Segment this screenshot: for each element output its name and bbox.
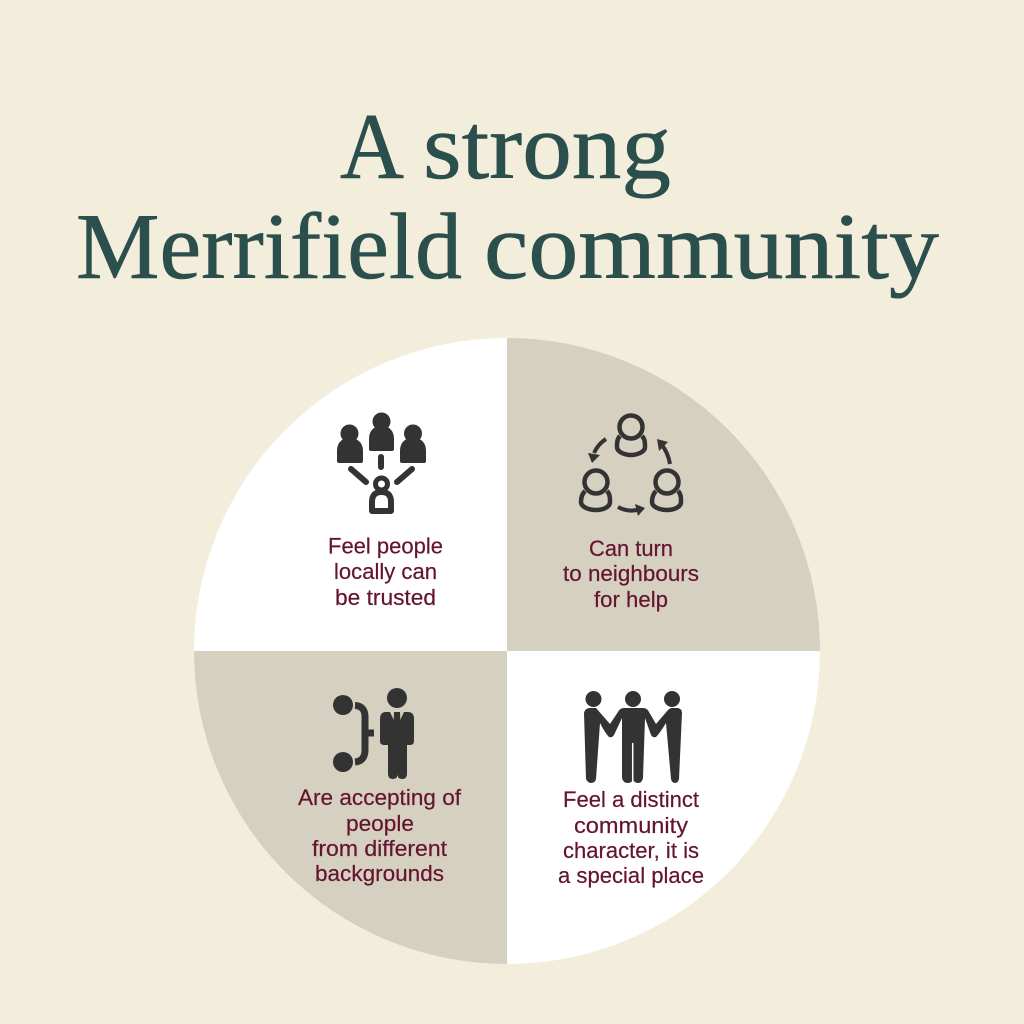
panel: accepting [194,651,507,964]
label: feel a distinct community character, it is a special place: character, it is [563,838,699,863]
icon: three people with cycle arrows [581,416,681,516]
label: feel people locally can be trusted: Feel people [328,534,443,558]
icon: person with bracket and two nodes [333,688,414,779]
label: can turn to neighbours for help: for help [594,587,668,612]
label: feel a distinct community character, it is a special place: a special place [558,863,704,888]
label: are accepting of people from different backgrounds: from different [312,836,447,861]
label: feel a distinct community character, it is a special place [558,787,704,888]
title: community [484,195,939,299]
title: A [340,95,404,199]
icon: three people holding hands [584,691,682,783]
label: are accepting of people from different backgrounds: people [346,811,414,836]
label: feel a distinct community character, it is a special place: Feel a distinct [563,787,699,812]
label: feel people locally can be trusted: locally can [334,559,437,584]
quadrant circle [194,338,820,964]
label: feel people locally can be trusted: be trusted [335,585,436,610]
label: feel a distinct community character, it is a special place: community [574,813,688,838]
label: feel people locally can be trusted [328,534,443,610]
panel: trust [194,338,507,651]
label: are accepting of people from different backgrounds: backgrounds [315,861,444,886]
title: strong [423,95,671,199]
title: Merrifield [76,195,462,299]
panel: character [507,651,820,964]
title [76,95,939,299]
icon: people connected to a person [337,412,426,511]
label: can turn to neighbours for help [563,536,699,612]
label: are accepting of people from different backgrounds: Are accepting of [298,785,462,810]
label: are accepting of people from different backgrounds [298,785,462,886]
panel: neighbours [507,338,820,651]
label: can turn to neighbours for help: to neighbours [563,561,699,586]
label: can turn to neighbours for help: Can turn [589,536,673,561]
